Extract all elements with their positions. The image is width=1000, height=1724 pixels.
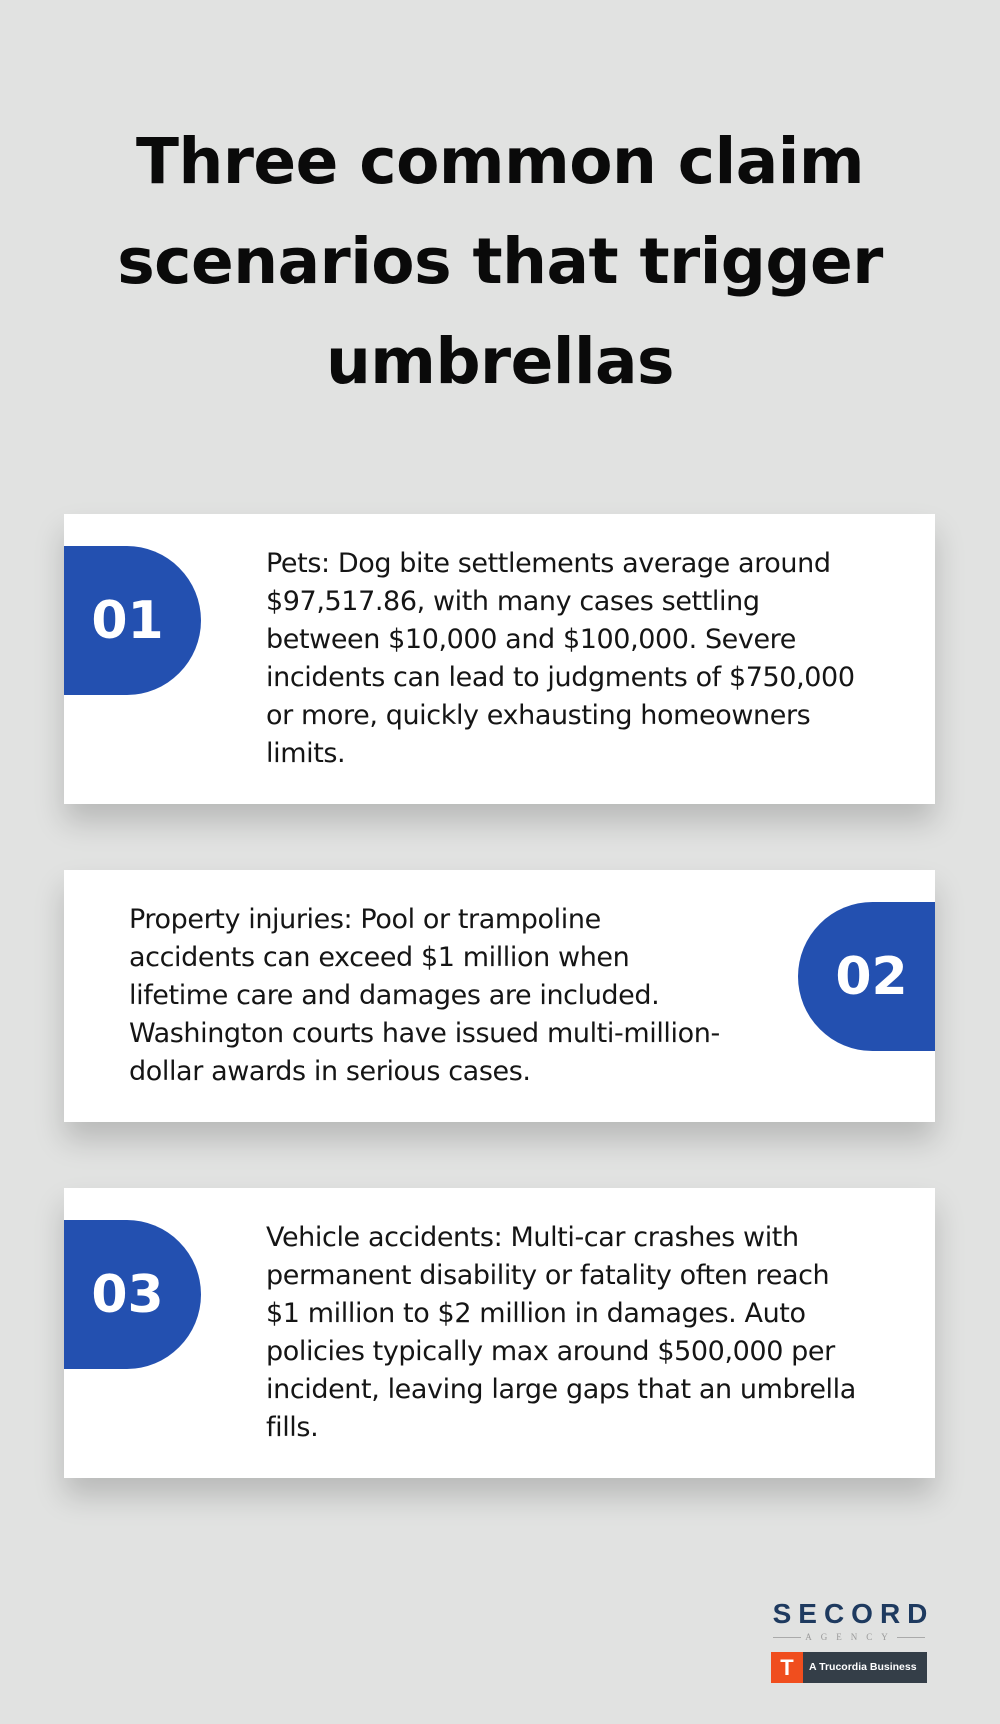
card 1: pets [64,514,935,804]
text: pets: Pets: Dog bite settlements average around $97,517.86, with many cases settling between $10,000 and $100,000. Severe incidents can lead to judgments of $750,000 or more, quickly exhausting homeowners limits. [266,548,855,769]
card 3: vehicle [64,1188,935,1478]
trucordia badge: T [780,1655,794,1680]
title: Three common claim [136,125,864,198]
trucordia badge: A Trucordia Business [809,1661,917,1673]
badge 01 [64,546,201,695]
agency line: AGENCY [805,1632,897,1642]
badge 03 [64,1220,201,1369]
badge 02 [798,902,935,1051]
text: property: Property injuries: Pool or trampoline accidents can exceed $1 million when lifetime care and damages are included. Washington courts have issued multi-million-dollar awards in serious cases. [129,904,720,1087]
badge 03: 03 [91,1264,164,1324]
title: umbrellas [326,325,674,398]
logo [771,1598,934,1683]
text: vehicle: Vehicle accidents: Multi-car crashes with permanent disability or fatality often reach $1 million to $2 million in damages. Auto policies typically max around $500,000 per incident, leaving large gaps that an umbrella fills. [266,1222,856,1443]
logo wordmark: SECORD [773,1598,934,1629]
title: scenarios that trigger [117,225,883,298]
title [117,125,884,398]
card 2: property injuries [64,870,935,1122]
trucordia badge [771,1652,927,1683]
badge 02: 02 [835,946,908,1006]
badge 01: 01 [91,590,164,650]
